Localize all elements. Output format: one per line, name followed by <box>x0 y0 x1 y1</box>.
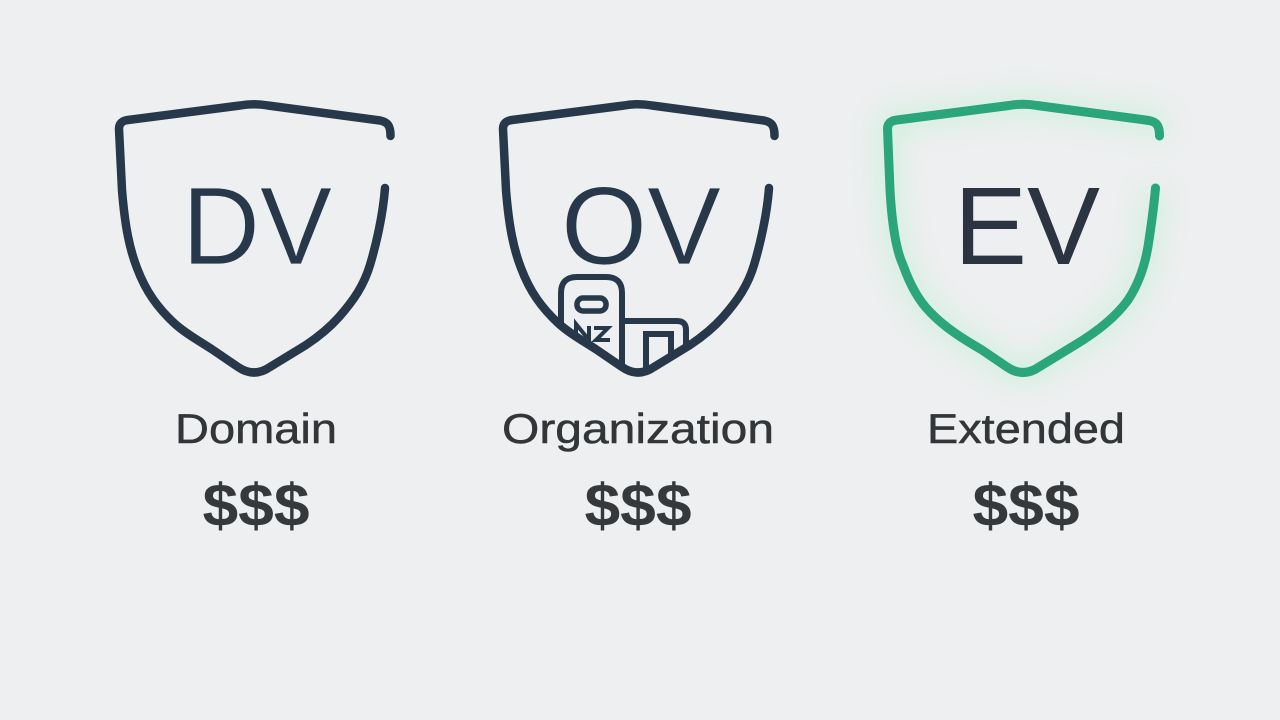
panel: EV extended validation <box>888 104 1160 539</box>
price: EV: $$$ <box>972 472 1080 539</box>
shield letters DV: DV <box>182 165 332 288</box>
icon: OV shield <box>503 104 774 372</box>
icon: EV shield <box>888 104 1160 372</box>
panel: OV organization validation <box>502 104 774 539</box>
shield letters OV: OV <box>561 165 721 288</box>
icon: office buildings <box>561 277 686 375</box>
label: Organization: Organization <box>502 405 774 452</box>
glow: EV shield halo <box>888 104 1160 372</box>
price: OV: $$$ <box>584 472 692 539</box>
shield letters EV: EV <box>954 165 1100 288</box>
label: Extended: Extended <box>927 405 1125 452</box>
label: Domain: Domain <box>175 405 337 452</box>
panel: DV domain validation <box>119 104 390 539</box>
price: DV: $$$ <box>202 472 310 539</box>
icon: DV shield <box>119 104 390 372</box>
